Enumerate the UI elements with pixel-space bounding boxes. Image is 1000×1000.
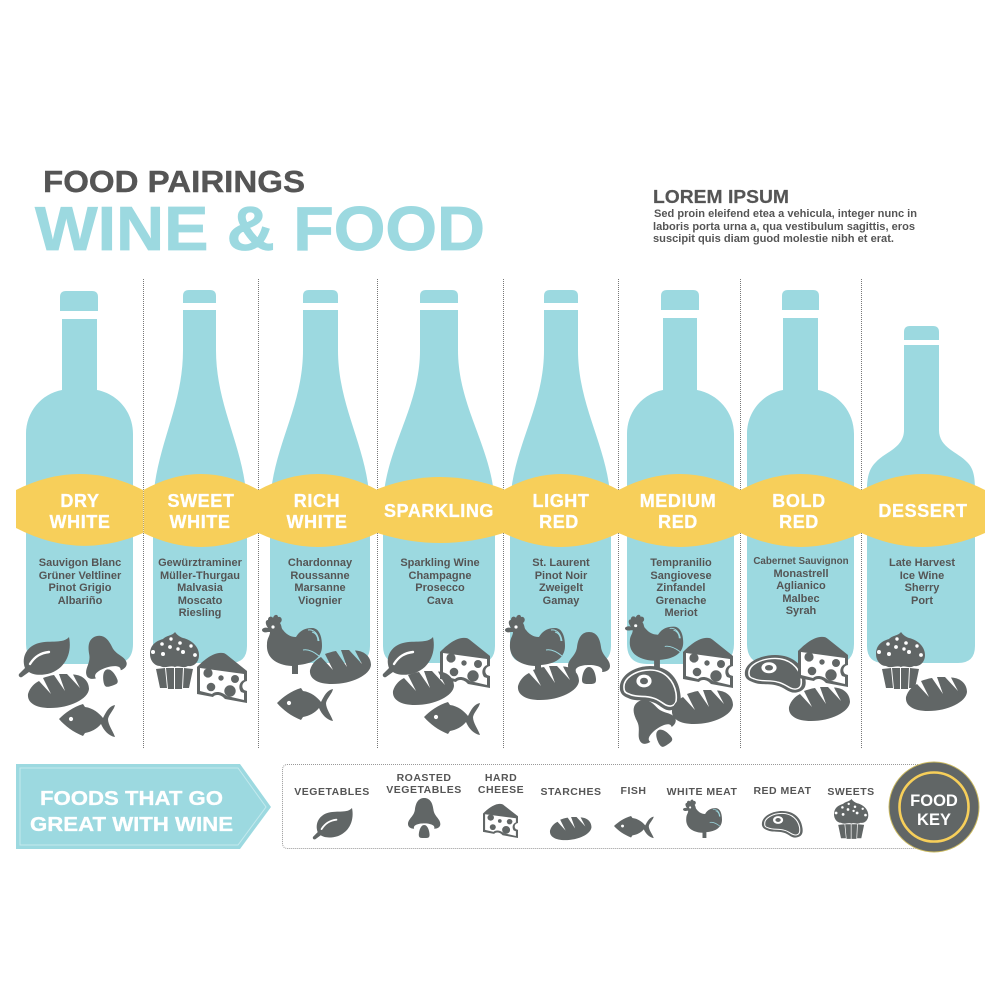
varieties: dessert: Port <box>911 595 933 607</box>
label: light red: LIGHT <box>532 491 590 511</box>
varieties: rich white: Marsanne <box>294 582 346 594</box>
text block: intro: Sed proin eleifend etea a vehicula, integer nunc in <box>654 208 917 220</box>
varieties: dessert: Sherry <box>905 582 940 594</box>
key: roasted vegetables: ROASTED <box>397 772 451 784</box>
varieties: sweet white: Gewürztraminer <box>158 557 243 569</box>
varieties: dry white: Pinot Grigio <box>49 582 112 594</box>
band: dessert <box>862 474 985 547</box>
bottle: sparkling <box>383 290 495 663</box>
varieties: sparkling: Champagne <box>409 570 471 582</box>
panel: bold red <box>740 290 862 721</box>
varieties: bold red: Monastrell <box>773 568 829 580</box>
key: starches: STARCHES <box>541 786 601 798</box>
icon: cupcake <box>150 632 199 689</box>
icon: cheese <box>798 637 848 687</box>
badge: food key: KEY <box>917 811 951 829</box>
icon: bread <box>672 690 733 724</box>
panel: food key <box>282 764 930 848</box>
key: fish: FISH <box>621 785 646 797</box>
band: rich white <box>258 474 378 547</box>
heading: lorem ipsum: LOREM IPSUM <box>653 187 789 207</box>
varieties: dry white: Albariño <box>58 595 103 607</box>
key: sweets <box>827 786 875 839</box>
icon: red meat steak <box>745 655 806 693</box>
label: sparkling: SPARKLING <box>384 501 494 521</box>
column dividers <box>144 279 862 748</box>
band: sparkling <box>378 477 504 543</box>
panel: sparkling <box>378 290 504 735</box>
varieties: sweet white: Müller-Thurgau <box>160 570 240 582</box>
icon: vegetable leaf <box>383 637 434 677</box>
varieties: sweet white: Moscato <box>178 595 223 607</box>
key: hard cheese <box>478 772 524 838</box>
key: roasted vegetables <box>386 772 462 838</box>
varieties: light red: St. Laurent <box>532 557 590 569</box>
key: hard cheese: HARD <box>485 772 517 784</box>
icon: bread <box>393 671 454 705</box>
bottle: dry white <box>26 291 133 664</box>
key: vegetables: VEGETABLES <box>294 786 370 798</box>
text block: intro: laboris porta urna a, qua vestibulum sagittis, eros <box>653 221 915 233</box>
key: sweets: SWEETS <box>827 786 875 798</box>
varieties: sweet white: Riesling <box>179 607 221 619</box>
band: light red <box>504 474 618 547</box>
varieties: bold red: Cabernet Sauvignon <box>753 556 849 567</box>
label: rich white: WHITE <box>286 512 348 532</box>
icon: mushroom <box>621 690 685 756</box>
icon: fish <box>277 688 333 721</box>
icon: white meat chicken <box>262 615 322 674</box>
text block: intro <box>653 208 917 245</box>
badge: food key: FOOD <box>910 792 958 810</box>
varieties: sparkling: Cava <box>427 595 454 607</box>
bottle: bold red <box>747 290 854 664</box>
panel: medium red <box>618 290 740 756</box>
label: medium red: RED <box>658 512 698 532</box>
varieties: dessert: Late Harvest <box>889 557 955 569</box>
icon: white meat chicken <box>505 615 565 674</box>
label: medium red: MEDIUM <box>640 491 716 511</box>
icon: cheese <box>440 638 490 688</box>
varieties: light red: Pinot Noir <box>535 570 588 582</box>
key: white meat: WHITE MEAT <box>667 786 737 798</box>
label: rich white: RICH <box>294 491 340 511</box>
varieties: light red: Gamay <box>543 595 580 607</box>
icon: white meat chicken <box>625 615 683 668</box>
icon: fish <box>424 702 480 735</box>
key: starches <box>541 786 601 840</box>
key: fish <box>614 785 654 838</box>
label: dessert: DESSERT <box>878 501 968 521</box>
varieties: medium red: Zinfandel <box>657 582 705 594</box>
icon: bread <box>789 687 850 721</box>
band: medium red <box>618 474 740 547</box>
icon: fish <box>59 704 115 737</box>
icon: red meat steak <box>620 666 681 710</box>
bottle: dessert <box>867 326 975 663</box>
panel: sweet white <box>144 290 258 703</box>
key: red meat: RED MEAT <box>753 785 812 797</box>
varieties: sparkling: Prosecco <box>415 582 465 594</box>
varieties: light red: Zweigelt <box>539 582 583 594</box>
panel: dry white <box>16 291 143 737</box>
varieties: medium red: Grenache <box>656 595 706 607</box>
key: red meat <box>753 785 812 838</box>
label: sweet white: WHITE <box>170 512 230 532</box>
icon: bread <box>906 677 967 711</box>
varieties: dry white: Sauvigon Blanc <box>39 557 121 569</box>
key: roasted vegetables: VEGETABLES <box>386 784 462 796</box>
key: white meat <box>667 786 737 838</box>
varieties: medium red: Sangiovese <box>650 570 712 582</box>
bottle: medium red <box>627 290 734 664</box>
varieties: dry white: Grüner Veltliner <box>39 570 122 582</box>
icon: cheese <box>683 638 733 688</box>
arrow text: FOODS THAT GO <box>40 787 223 810</box>
varieties: rich white: Roussanne <box>290 570 350 582</box>
title: wine and food: WINE & FOOD <box>35 195 485 264</box>
panel: light red <box>504 290 618 700</box>
varieties: sweet white: Malvasia <box>177 582 224 594</box>
bottle: light red <box>510 290 611 663</box>
band: sweet white <box>144 474 258 547</box>
icon: bread <box>310 650 371 684</box>
varieties: bold red: Syrah <box>786 605 817 617</box>
icon: vegetable leaf <box>19 637 70 677</box>
icon: bread <box>518 666 579 700</box>
arrow text: GREAT WITH WINE <box>30 813 233 836</box>
label: dry white: WHITE <box>50 512 110 532</box>
varieties: dessert: Ice Wine <box>900 570 944 582</box>
icon: bread <box>28 674 89 708</box>
arrow text <box>30 787 233 836</box>
badge: food key <box>889 762 979 852</box>
text block: intro: suscipit quis diam guod molestie nibh et erat. <box>653 233 894 245</box>
label: dry white: DRY <box>60 491 100 511</box>
label: bold red: RED <box>779 512 819 532</box>
key: vegetables <box>294 786 370 839</box>
panel: rich white <box>258 290 378 721</box>
varieties: medium red: Meriot <box>664 607 698 619</box>
varieties: rich white: Chardonnay <box>288 557 353 569</box>
panel: dessert <box>862 326 985 711</box>
icon: mushroom <box>76 630 132 692</box>
varieties: bold red: Aglianico <box>776 580 826 592</box>
bottle: rich white <box>270 290 370 663</box>
bottle: sweet white <box>153 290 247 663</box>
key: hard cheese: CHEESE <box>478 784 524 796</box>
title: food pairings: FOOD PAIRINGS <box>43 164 305 199</box>
varieties: rich white: Viognier <box>298 595 343 607</box>
label: sweet white: SWEET <box>167 491 235 511</box>
band: bold red <box>740 474 862 547</box>
icon: mushroom <box>568 632 610 684</box>
icon: cupcake <box>876 632 925 689</box>
label: bold red: BOLD <box>772 491 826 511</box>
icon: cheese <box>197 653 247 703</box>
arrow banner <box>16 764 271 849</box>
varieties: medium red: Tempranilio <box>650 557 712 569</box>
label: light red: RED <box>539 512 579 532</box>
band: dry white <box>16 474 143 546</box>
varieties: bold red: Malbec <box>782 593 820 605</box>
varieties: sparkling: Sparkling Wine <box>400 557 480 569</box>
